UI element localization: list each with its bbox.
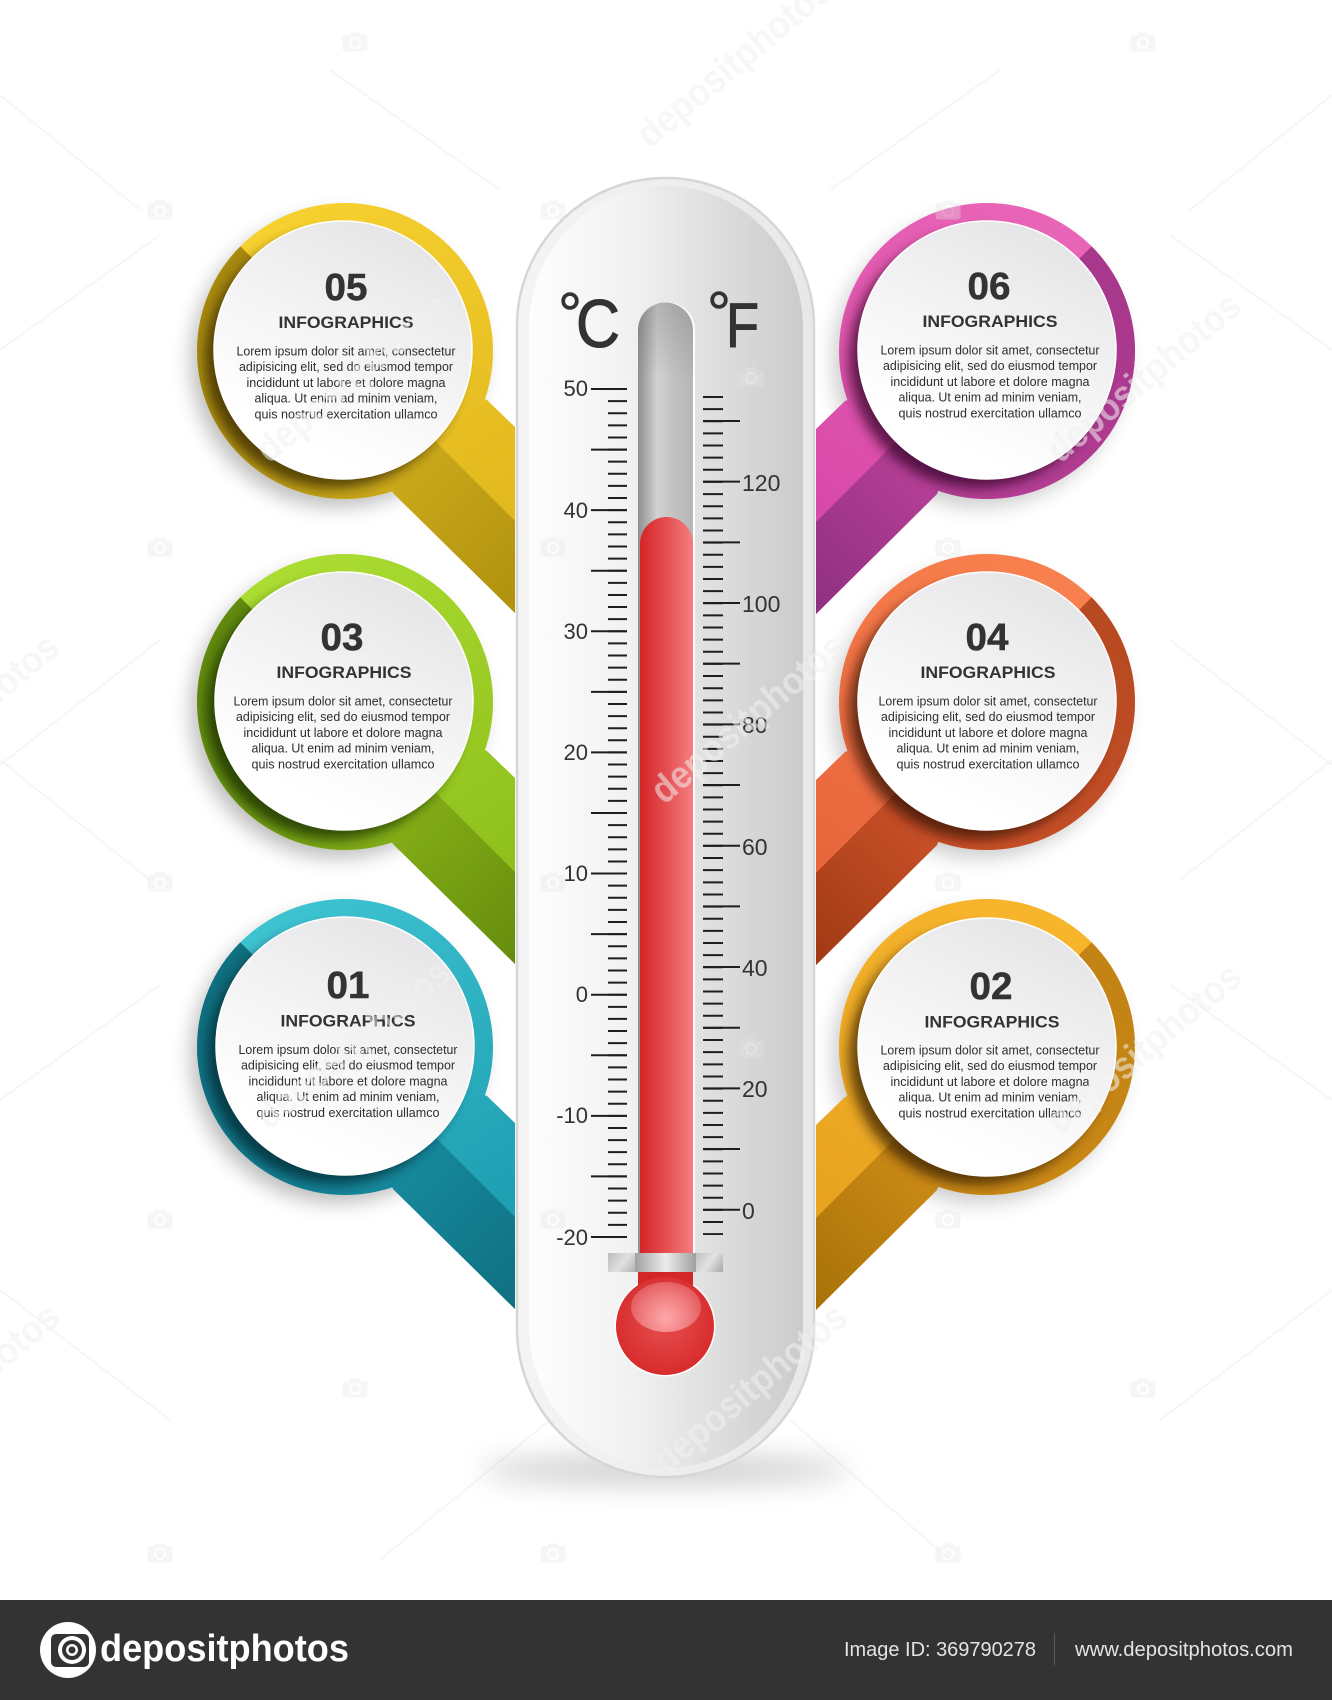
thermometer face (529, 186, 803, 1468)
watermark overlay: depositphotos (248, 285, 459, 471)
heading 03: INFOGRAPHICS (276, 663, 412, 682)
body text 01: Lorem ipsum dolor sit amet, consectetur (238, 1043, 458, 1057)
body text 06 (880, 344, 1100, 420)
glass tube (638, 302, 695, 1255)
body text 06: aliqua. Ut enim ad minim veniam, (898, 391, 1082, 405)
number 01: 01 (326, 965, 370, 1007)
body text 02: aliqua. Ut enim ad minim veniam, (898, 1091, 1082, 1105)
body text 01: adipisicing elit, sed do eiusmod tempor (241, 1059, 455, 1073)
ribbon and ring 04 (816, 554, 1135, 965)
fahrenheit scale labels: 120 (742, 470, 780, 496)
body text 01: incididunt ut labore et dolore magna (248, 1074, 448, 1088)
body text 06: adipisicing elit, sed do eiusmod tempor (883, 359, 1097, 373)
celsius scale labels: 10 (564, 861, 588, 886)
white disc 01 (216, 917, 474, 1175)
fahrenheit scale labels: 80 (742, 712, 768, 738)
item 04: orange circle callout (816, 554, 1135, 965)
body text 01 (238, 1043, 458, 1120)
thermometer (480, 178, 850, 1484)
footer bar (0, 1600, 1332, 1700)
fahrenheit scale labels: 0 (742, 1198, 755, 1224)
white disc 03 (215, 572, 473, 830)
brand wordmark: depositphotos (100, 1628, 349, 1670)
number 03: 03 (320, 617, 364, 659)
fahrenheit scale labels: 100 (742, 591, 780, 617)
watermark overlay: depositphotos (645, 1296, 856, 1482)
body text 04: quis nostrud exercitation ullamco (896, 757, 1080, 771)
body text 01: aliqua. Ut enim ad minim veniam, (256, 1090, 440, 1104)
body text 05: quis nostrud exercitation ullamco (254, 407, 438, 421)
item 01: teal circle callout (190, 892, 520, 1346)
body text 02: Lorem ipsum dolor sit amet, consectetur (880, 1044, 1100, 1058)
body text 02: incididunt ut labore et dolore magna (890, 1075, 1090, 1089)
celsius scale ticks (609, 388, 618, 1239)
ribbon and ring 02 (816, 899, 1135, 1310)
celsius scale labels: -20 (556, 1225, 588, 1250)
body text 05: Lorem ipsum dolor sit amet, consectetur (236, 344, 456, 358)
celsius scale labels: -10 (556, 1103, 588, 1128)
fahrenheit scale labels: 60 (742, 834, 768, 860)
fahrenheit scale ticks (713, 396, 722, 1235)
body text 03: adipisicing elit, sed do eiusmod tempor (236, 710, 450, 724)
body text 06: incididunt ut labore et dolore magna (890, 375, 1090, 389)
body text 06: Lorem ipsum dolor sit amet, consectetur (880, 344, 1100, 358)
item 02: amber circle callout (816, 899, 1135, 1310)
number 04: 04 (966, 617, 1008, 659)
thermometer casing (517, 178, 814, 1477)
metal collar (608, 1253, 723, 1272)
celsius scale labels: 40 (564, 498, 588, 523)
body text 02: adipisicing elit, sed do eiusmod tempor (883, 1059, 1097, 1073)
celsius scale labels: 20 (564, 740, 588, 765)
body text 03: Lorem ipsum dolor sit amet, consectetur (234, 694, 452, 708)
body text 04: Lorem ipsum dolor sit amet, consectetur (878, 694, 1098, 708)
fahrenheit scale labels (742, 470, 780, 1224)
number 05: 05 (324, 267, 368, 309)
body text 04: incididunt ut labore et dolore magna (888, 726, 1088, 740)
bulb (614, 1270, 716, 1376)
body text 05: adipisicing elit, sed do eiusmod tempor (239, 360, 453, 374)
red mercury column (640, 517, 693, 1255)
body text 04: aliqua. Ut enim ad minim veniam, (896, 742, 1080, 756)
celsius scale labels: 0 (576, 982, 588, 1007)
white disc 04 (858, 572, 1116, 830)
item 06: magenta circle callout (816, 203, 1135, 614)
white disc 02 (858, 918, 1116, 1176)
watermark overlay: depositphotos (643, 626, 854, 812)
body text 05: aliqua. Ut enim ad minim veniam, (254, 392, 438, 406)
celsius unit symbol: ° (558, 281, 582, 348)
celsius scale labels: 50 (564, 376, 588, 401)
website url: www.depositphotos.com (1074, 1639, 1293, 1661)
body text 03: quis nostrud exercitation ullamco (252, 757, 435, 771)
watermark overlay: depositphotos (248, 952, 459, 1138)
body text 04: adipisicing elit, sed do eiusmod tempor (881, 710, 1095, 724)
white disc 06 (858, 221, 1116, 479)
celsius scale labels: 30 (564, 619, 588, 644)
heading 02: INFOGRAPHICS (924, 1012, 1060, 1032)
body text 03: aliqua. Ut enim ad minim veniam, (252, 742, 434, 756)
item 03: green circle callout (190, 547, 520, 1001)
body text 02 (880, 1044, 1100, 1120)
heading 06: INFOGRAPHICS (922, 312, 1058, 331)
body text 03 (234, 694, 452, 771)
body text 03: incididunt ut labore et dolore magna (244, 726, 443, 740)
ribbon and ring 03 (197, 554, 515, 964)
celsius unit symbol (558, 281, 620, 362)
celsius unit symbol: C (576, 286, 620, 362)
item 05: yellow circle callout (190, 196, 520, 650)
fahrenheit unit symbol (707, 280, 759, 361)
heading 01: INFOGRAPHICS (280, 1012, 416, 1030)
fahrenheit scale labels: 40 (742, 955, 768, 981)
divider (1054, 1633, 1055, 1665)
watermark overlay: depositphotos (1039, 956, 1250, 1142)
body text 01: quis nostrud exercitation ullamco (256, 1106, 440, 1120)
fahrenheit scale labels: 20 (742, 1076, 768, 1102)
body text 05 (236, 344, 456, 421)
fahrenheit unit symbol: F (726, 291, 759, 361)
number 06: 06 (968, 266, 1010, 308)
fahrenheit unit symbol: ° (707, 280, 731, 347)
heading 04: INFOGRAPHICS (920, 663, 1056, 682)
body text 06: quis nostrud exercitation ullamco (898, 406, 1082, 420)
watermark overlay: depositphotos (1039, 285, 1250, 471)
heading 05: INFOGRAPHICS (278, 313, 414, 332)
white disc 05 (214, 221, 472, 479)
body text 02: quis nostrud exercitation ullamco (898, 1106, 1082, 1120)
celsius scale labels (556, 376, 588, 1250)
ribbon and ring 01 (197, 899, 515, 1309)
number 02: 02 (970, 966, 1012, 1008)
image id: Image ID: 369790278 (844, 1639, 1036, 1661)
icon: depositphotos camera logo (40, 1622, 96, 1678)
body text 04 (878, 694, 1098, 771)
ribbon and ring 06 (816, 203, 1135, 614)
ribbon and ring 05 (197, 203, 515, 613)
body text 05: incididunt ut labore et dolore magna (246, 376, 446, 390)
